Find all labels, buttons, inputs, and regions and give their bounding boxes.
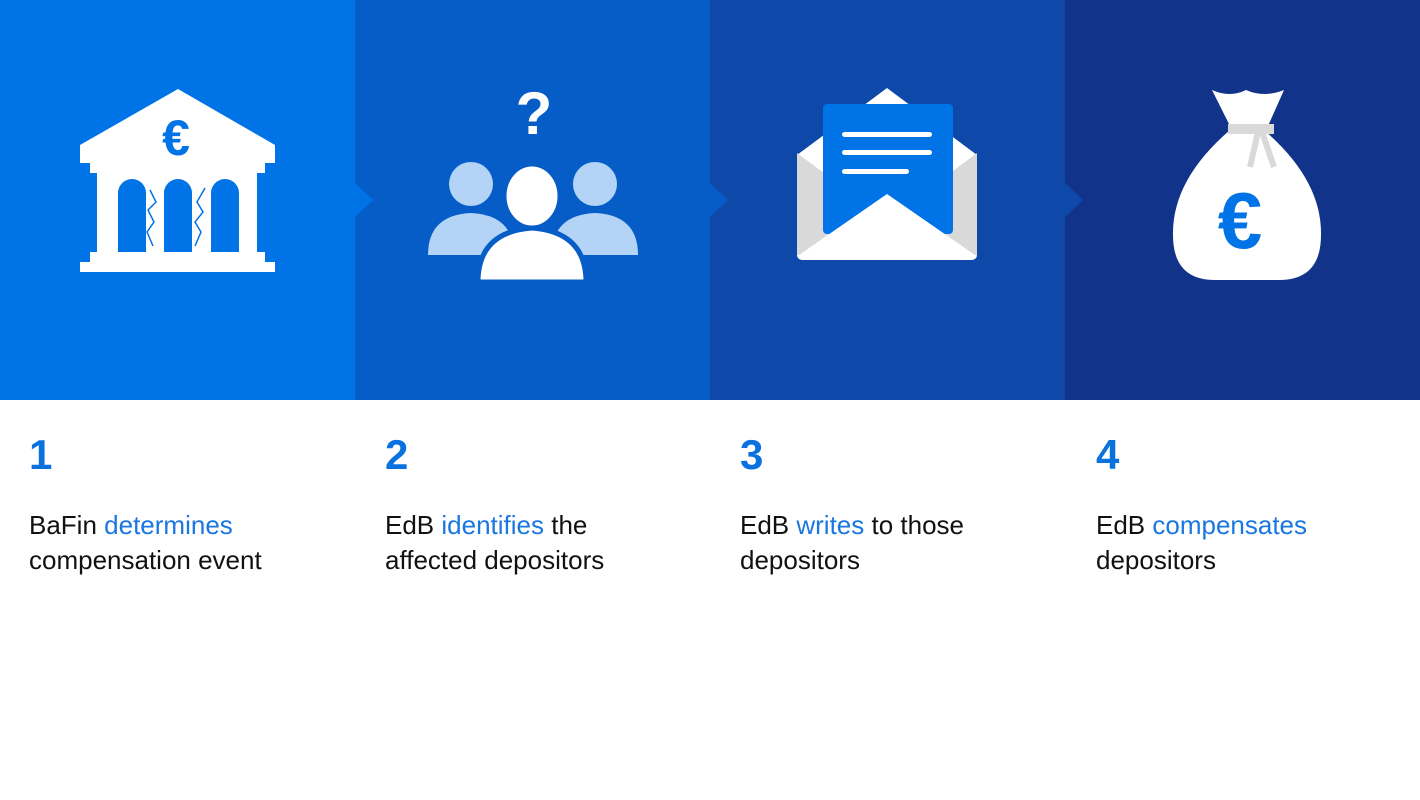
icon: money bag: € xyxy=(1218,176,1262,265)
arrow 3 xyxy=(1064,182,1083,218)
arrow 2 xyxy=(709,182,728,218)
step 4 text: 4 xyxy=(1096,431,1119,478)
icon: people with question mark xyxy=(428,80,638,282)
icon: bank xyxy=(80,89,275,272)
step 1 text xyxy=(29,431,262,575)
icon: envelope with letter xyxy=(797,88,977,260)
step 3 text: 3 xyxy=(740,431,763,478)
step 3 text xyxy=(740,431,964,575)
panel: step 4 background xyxy=(1065,0,1420,400)
panel: step 3 background xyxy=(710,0,1065,400)
step 1 text: BaFin determines xyxy=(29,510,233,540)
step 2 text xyxy=(385,431,604,575)
step 1 text: compensation event xyxy=(29,545,262,575)
step 4 text: EdB compensates xyxy=(1096,510,1307,540)
step 3 text: depositors xyxy=(740,545,860,575)
icon: people with question mark: ? xyxy=(516,80,552,147)
step 1 text: 1 xyxy=(29,431,52,478)
step 2 text: 2 xyxy=(385,431,408,478)
icon: bank: € xyxy=(162,110,190,166)
panel: step 2 background xyxy=(355,0,710,400)
step 2 text: EdB identifies the xyxy=(385,510,587,540)
step 4 text xyxy=(1096,431,1307,575)
icon: money bag xyxy=(1173,90,1321,280)
step 3 text: EdB writes to those xyxy=(740,510,964,540)
panel: step 1 background xyxy=(0,0,355,400)
step 2 text: affected depositors xyxy=(385,545,604,575)
step 4 text: depositors xyxy=(1096,545,1216,575)
icons and arrows xyxy=(80,80,1321,280)
arrow 1 xyxy=(354,182,373,218)
